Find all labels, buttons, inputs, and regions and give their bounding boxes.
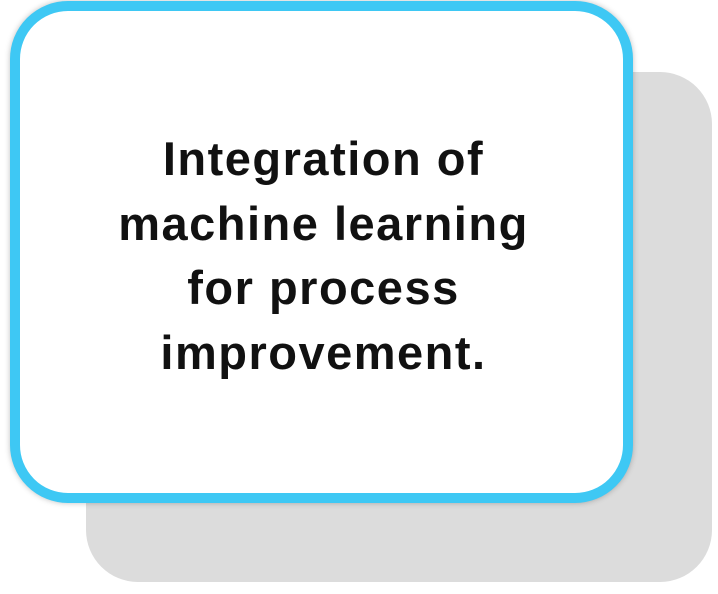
main card [10, 1, 633, 503]
card text: for process [187, 261, 460, 314]
shadow card [86, 72, 712, 582]
card text: machine learning [118, 196, 529, 250]
card text [118, 132, 529, 379]
card text: improvement. [160, 326, 487, 378]
card text: Integration of [163, 132, 484, 185]
